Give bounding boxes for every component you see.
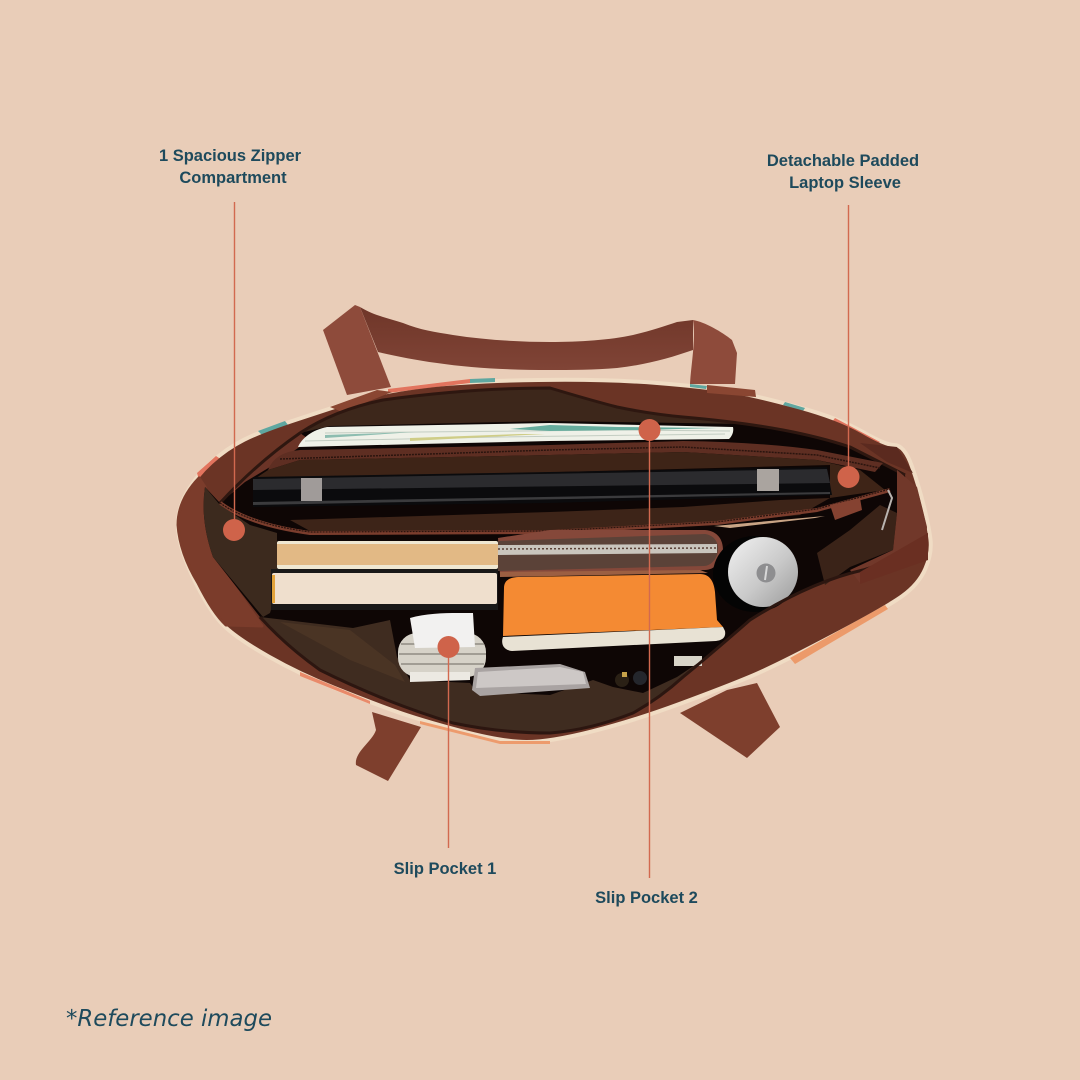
front handles [356, 683, 780, 781]
cable charger [398, 613, 486, 682]
laptop [253, 467, 832, 507]
callout: Slip Pocket 1 [394, 636, 496, 878]
sleeve lower lining [290, 498, 830, 531]
callout: Detachable Padded Laptop Sleeve: Laptop Sleeve [789, 174, 901, 192]
left lining [204, 487, 277, 617]
notebook [298, 423, 733, 447]
left leather side panel [178, 478, 262, 626]
callout: Slip Pocket 1: Slip Pocket 1 [394, 860, 496, 878]
bag illustration [178, 305, 929, 781]
book 2 [271, 569, 498, 610]
sleeve upper lining [253, 452, 885, 498]
front zipper tab [860, 533, 928, 584]
leather patches [330, 390, 392, 412]
pouch lower strip [500, 570, 708, 577]
front pocket zipper [260, 550, 927, 733]
front pocket lining [260, 617, 707, 733]
top zipper [220, 388, 905, 503]
callout: Detachable Padded Laptop Sleeve: Detachable Padded [767, 152, 919, 170]
callout: Slip Pocket 2: Slip Pocket 2 [595, 889, 698, 907]
callout: 1 Spacious Zipper Compartment [159, 147, 302, 541]
main interior [204, 388, 912, 733]
zip pouch [498, 530, 723, 575]
top pocket lining [300, 388, 745, 433]
patterned outer rim [180, 382, 929, 740]
phone [472, 664, 590, 696]
laptop sleeve back panel [268, 441, 883, 472]
pens [615, 656, 702, 687]
rim pattern accents [197, 378, 888, 744]
pocket highlight [280, 622, 405, 682]
top zipper tab [860, 443, 913, 473]
callout: Slip Pocket 2 [595, 419, 698, 907]
callout: 1 Spacious Zipper Compartment: Compartment [179, 169, 287, 187]
orange box [502, 574, 725, 651]
steel bottle [713, 536, 798, 612]
sleeve front zipper edge [220, 490, 890, 533]
book 1 [277, 541, 498, 569]
leather body [180, 382, 929, 740]
left flap [220, 433, 310, 503]
right leather side [850, 470, 927, 583]
back handle [323, 305, 737, 395]
callout: Detachable Padded Laptop Sleeve [767, 152, 919, 488]
right lining [817, 505, 897, 585]
callout: 1 Spacious Zipper Compartment: 1 Spacious Zipper [159, 147, 302, 165]
footnote: *Reference image [66, 1006, 272, 1032]
zipper pull [882, 490, 892, 530]
